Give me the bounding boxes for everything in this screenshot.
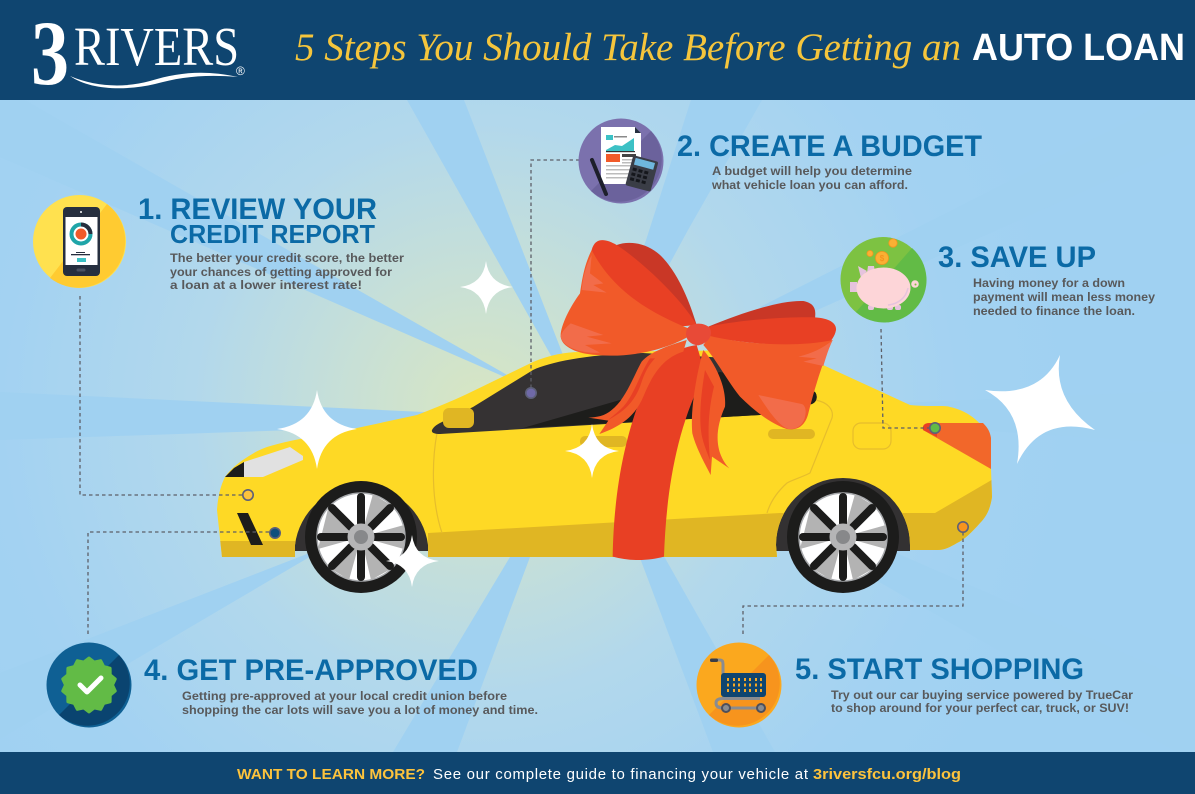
step 4: get pre-approved	[46, 642, 538, 728]
footer call to action: 3riversfcu.org/blog	[813, 766, 961, 783]
step 3: save up	[840, 237, 1156, 323]
car body	[217, 350, 992, 557]
body text	[711, 166, 912, 192]
right loop	[703, 317, 836, 429]
icon: piggy bank: $	[880, 254, 885, 263]
body text: A budget will help you determine	[712, 166, 912, 178]
window	[432, 353, 817, 434]
heading: CREDIT REPORT	[170, 219, 375, 249]
body text	[170, 253, 405, 292]
logo: 3 Rivers: RIVERS	[74, 16, 239, 77]
mirror	[443, 408, 474, 428]
body text: your chances of getting approved for	[170, 267, 393, 279]
footer call to action: See our complete guide to financing your vehicle at	[433, 766, 809, 783]
car	[210, 350, 995, 593]
body text: a loan at a lower interest rate!	[170, 280, 362, 292]
body text: payment will mean less money	[973, 292, 1156, 304]
step 1: review your credit report	[33, 193, 405, 292]
logo: 3 Rivers: 3	[31, 2, 69, 104]
headline: AUTO LOAN	[972, 27, 1185, 69]
left ribbon tail	[588, 340, 687, 434]
icon: shopping cart	[696, 642, 782, 728]
heading: 1. REVIEW YOUR	[138, 193, 377, 226]
body text: The better your credit score, the better	[170, 253, 405, 265]
heading	[138, 193, 377, 249]
body text	[831, 690, 1134, 715]
footer bar	[0, 752, 1195, 794]
left loop	[561, 240, 697, 356]
body text: Getting pre-approved at your local credit union before	[182, 691, 507, 703]
wheel arches	[294, 473, 910, 551]
dotted connector lines	[80, 160, 963, 637]
heading: 2. CREATE A BUDGET	[677, 130, 982, 163]
body text: shopping the car lots will save you a lot of money and time.	[182, 705, 538, 717]
footer call to action	[237, 766, 961, 783]
heading: 3. SAVE UP	[938, 241, 1096, 274]
heading: 4. GET PRE-APPROVED	[144, 654, 478, 687]
body text: Try out our car buying service powered by TrueCar	[831, 690, 1134, 702]
sparkles	[277, 261, 1095, 587]
logo: 3 Rivers	[31, 2, 245, 104]
body text: to shop around for your perfect car, truck, or SUV!	[831, 703, 1129, 715]
body text	[182, 691, 538, 717]
back loops	[617, 243, 815, 330]
body text: needed to finance the loan.	[973, 306, 1135, 318]
front wheel	[305, 481, 417, 593]
body text: what vehicle loan you can afford.	[711, 180, 908, 192]
heading: 5. START SHOPPING	[795, 653, 1084, 686]
door handles	[580, 429, 815, 447]
icon: approval badge	[46, 642, 132, 728]
step 2: create a budget	[578, 118, 982, 204]
right ribbon tail	[692, 350, 729, 475]
rear wheel	[787, 481, 899, 593]
footer call to action: WANT TO LEARN MORE?	[237, 766, 425, 783]
grille mark	[237, 513, 263, 545]
vertical ribbon	[613, 345, 705, 560]
tail light	[923, 423, 991, 469]
body text: Having money for a down	[973, 278, 1125, 290]
icon: piggy bank	[840, 237, 927, 323]
gift bow and ribbon	[561, 240, 836, 560]
headline: 5 Steps You Should Take Before Getting an	[295, 26, 961, 69]
knot	[686, 324, 711, 345]
connector dots	[243, 388, 968, 538]
header bar	[0, 0, 1195, 100]
body seams	[433, 400, 891, 533]
logo: 3 Rivers: ®	[236, 64, 245, 78]
body text	[973, 278, 1156, 318]
lower sill	[210, 478, 995, 561]
icon: phone with credit score	[33, 195, 126, 288]
step 5: start shopping	[696, 642, 1134, 728]
headlight	[225, 447, 303, 477]
icon: budget documents	[578, 118, 664, 204]
